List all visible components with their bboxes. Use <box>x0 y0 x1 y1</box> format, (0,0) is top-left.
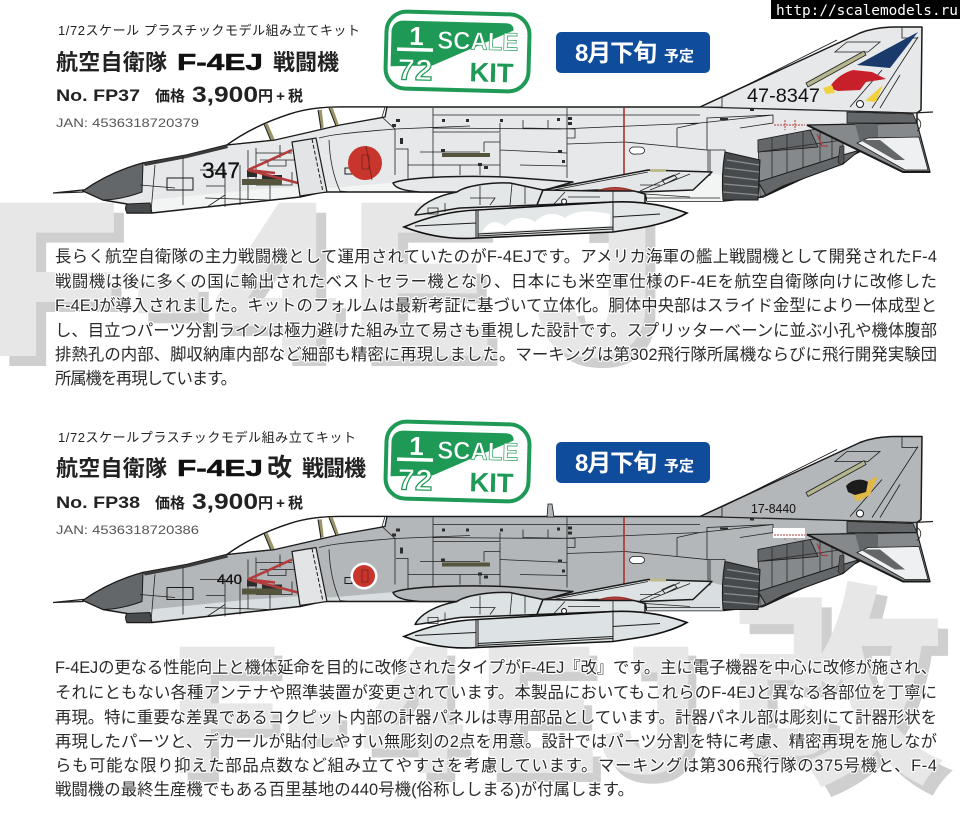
product title: 航空自衛隊 <box>56 50 167 75</box>
description text: FP38: らも可能な限り抑えた部品点数など組み立てやすさを考慮しています。マーキングは第306飛行隊の375号機と、F-4 <box>55 757 937 775</box>
tank scallops <box>482 211 610 232</box>
scale badge: 1/72 SCALE KIT: KIT <box>469 467 514 498</box>
scale badge: 1/72 SCALE KIT <box>385 421 530 502</box>
product title: 戦闘機 <box>273 50 339 75</box>
scale badge: 1/72 SCALE KIT: KIT <box>469 57 514 88</box>
scale badge: 1/72 SCALE KIT: 72 <box>397 53 433 87</box>
antenna <box>547 504 554 517</box>
description text: FP38: 再現。特に重要な差異であるコクピット内部の計器パネルは専用部品としています。計器パネル部は彫刻にて計器形状を <box>55 709 937 727</box>
release date label: FP38 <box>556 442 710 483</box>
tail emblem: black bird <box>846 476 878 502</box>
site URL tag: http://scalemodels.ru <box>776 3 958 19</box>
description text: FP38: F-4EJの更なる性能向上と機体延命を目的に改修されたタイプがF-4EJ『改』です。主に電子機器を中心に改修が施され、 <box>55 659 937 677</box>
number and price: 3,900 <box>192 82 258 107</box>
aircraft illustration: F-4EJ Kai grey <box>53 436 933 648</box>
hinomaru roundel <box>350 562 378 590</box>
kit type line: 1/72スケールプラスチックモデル組み立てキット <box>58 430 356 445</box>
scale badge: 1/72 SCALE KIT: 1 <box>409 21 424 51</box>
product header: FP38 <box>56 430 366 537</box>
kit type line: 1/72スケール プラスチックモデル組み立てキット <box>58 23 360 38</box>
number and price: 3,900 <box>192 489 258 514</box>
release date label: FP38: 予定 <box>664 458 694 475</box>
watermark: F-4EJ改 background lettering: F-4EJ <box>171 613 697 808</box>
description text: FP38 <box>55 659 937 799</box>
number and price: 円+税 <box>258 88 303 105</box>
number and price: 価格 <box>155 87 185 105</box>
nose number: 440 <box>217 571 242 587</box>
description text: FP38: 再現したパーツと、デカールが貼付しやすい無彫刻の2点を用意。設計ではパーツ分割を特に考慮、精密再現を施しなが <box>55 732 937 751</box>
aircraft illustration: F-4EJ light grey <box>53 27 933 238</box>
description text: FP37: 戦闘機は後に多くの国に輸出されたベストセラー機となり、日本にも米空軍仕様のF-4Eを航空自衛隊向けに改修した <box>55 273 937 291</box>
product title <box>56 49 339 75</box>
release date label: FP37: 予定 <box>664 48 694 65</box>
watermark: F-4EJ background lettering: F-4EJ <box>0 160 657 399</box>
product title: 戦闘機 <box>302 456 366 481</box>
nose number: 347 <box>202 158 240 183</box>
number and price: 価格 <box>155 494 185 512</box>
description text: FP37: 排熱孔の内部、脚収納庫内部など細部も精密に再現しました。マーキングは第302飛行隊所属機ならびに飛行開発実験団 <box>55 346 937 364</box>
watermark: F-4EJ background lettering: F-4EJ <box>0 170 667 409</box>
scale badge: 1/72 SCALE KIT <box>385 11 530 92</box>
description text: FP38: 戦闘機の最終生産機でもある百里基地の440号機(俗称ししまる)が付属します。 <box>55 781 634 799</box>
description text: FP37: し、目立つパーツ分割ラインは極力避けた組み立て易さも重視した設計です。スプリッターベーンに並ぶ小孔や機体腹部 <box>55 322 937 340</box>
release date label: FP38: 8月下旬 <box>575 450 657 477</box>
JAN code: JAN: 4536318720386 <box>56 523 199 537</box>
number and price <box>56 82 303 107</box>
description text: FP38: それにともない各種アンテナや照準装置が変更されています。本製品においてもこれらのF-4EJと異なる各部位を丁寧に <box>55 684 937 702</box>
scale badge: 1/72 SCALE KIT: SCALE <box>437 436 519 467</box>
product title: 改 <box>267 454 292 482</box>
number and price <box>56 489 303 514</box>
scale badge: 1/72 SCALE KIT: SCALE <box>437 26 519 57</box>
tail number: 17-8440 <box>751 501 796 516</box>
description text: FP37: F-4EJが導入されました。キットのフォルムは最新考証に基づいて立体化。胴体中央部はスライド金型により一体成型と <box>55 296 937 315</box>
product title: 航空自衛隊 <box>56 456 167 481</box>
red dotted warning panel <box>773 528 805 538</box>
tail emblem: blue, red and yellow <box>823 32 918 102</box>
watermark: F-4EJ改 background lettering <box>171 570 953 817</box>
description text: FP37 <box>55 248 937 388</box>
watermark: F-4EJ改 background lettering: 改 <box>738 580 953 817</box>
product title <box>56 454 366 482</box>
description text: FP37: 所属機を再現しています。 <box>55 370 237 388</box>
tail number: 47-8347 <box>747 86 820 107</box>
number and price: No. FP37 <box>56 86 140 105</box>
scale badge: 1/72 SCALE KIT: 72 <box>397 463 433 497</box>
scale badge: 1/72 SCALE KIT: 1 <box>409 431 424 461</box>
product title: F-4EJ <box>177 455 263 481</box>
product title: F-4EJ <box>177 49 263 75</box>
JAN code: JAN: 4536318720379 <box>56 116 199 130</box>
description text: FP37: 長らく航空自衛隊の主力戦闘機として運用されていたのがF-4EJです。アメリカ海軍の艦上戦闘機として開発されたF-4 <box>55 248 937 266</box>
watermark: F-4EJ改 background lettering: F-4EJ <box>179 622 705 817</box>
release date label: FP37: 8月下旬 <box>575 40 657 67</box>
number and price: 円+税 <box>258 495 303 512</box>
product header: FP37 <box>56 23 360 130</box>
release date label: FP37 <box>556 32 710 73</box>
number and price: No. FP38 <box>56 493 140 512</box>
watermark: F-4EJ改 background lettering: 改 <box>728 570 943 811</box>
hinomaru roundel <box>348 146 382 180</box>
